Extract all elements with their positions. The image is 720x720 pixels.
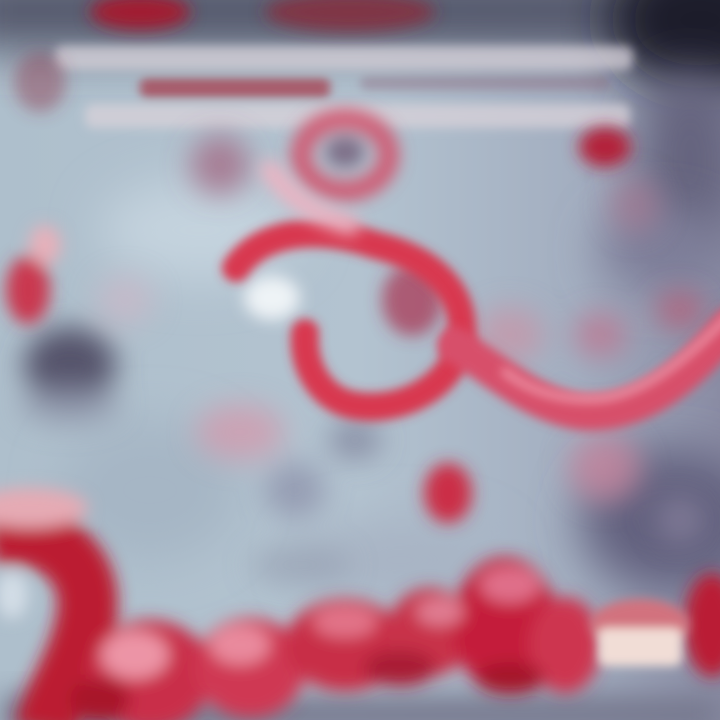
ring cell under the title (301, 119, 389, 191)
red looped ribbon (236, 170, 720, 413)
sharper cells (6, 225, 472, 523)
bright highlight (244, 276, 300, 320)
bottom red chain of cells (0, 488, 720, 720)
floating cells (20, 135, 704, 585)
title text band (illegible, blurred) (55, 46, 633, 128)
top red blobs (14, 0, 631, 167)
pale cell highlight bottom right (590, 599, 690, 666)
